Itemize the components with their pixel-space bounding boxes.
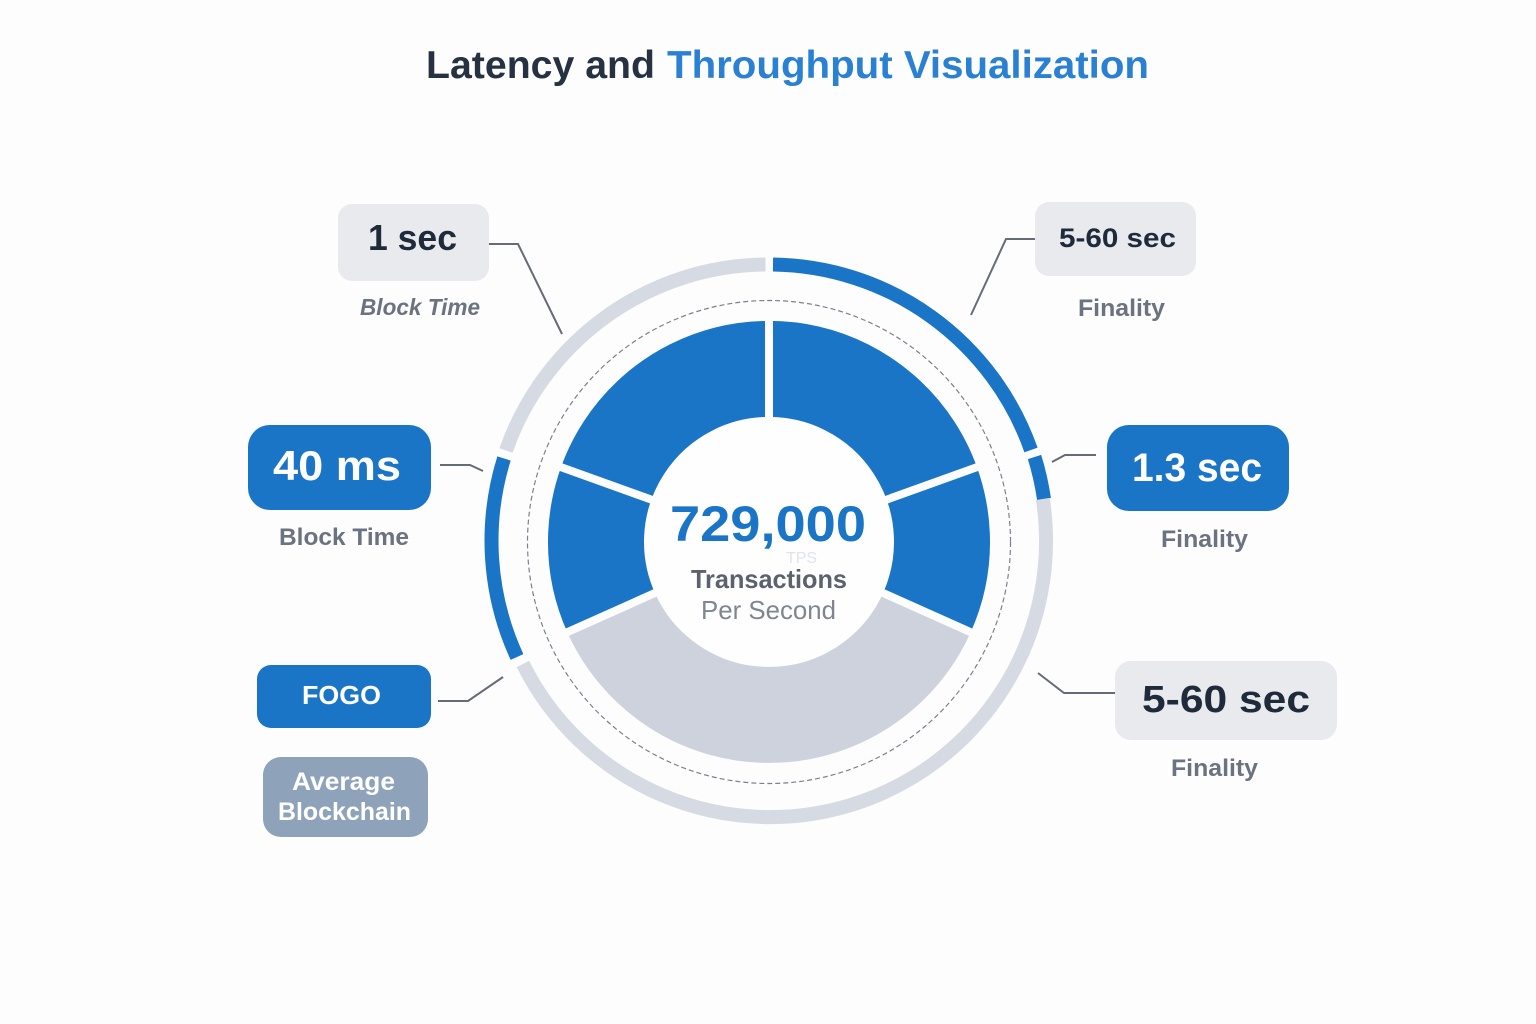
connector (1052, 455, 1096, 462)
callout: 5-60 sec finality top (971, 202, 1196, 322)
dashed guide ring (528, 300, 1010, 784)
value: 5-60 sec (1142, 679, 1310, 721)
ring segment: finality short blue (1034, 457, 1044, 499)
title: Throughput Visualization (667, 44, 1149, 87)
connector (1038, 673, 1115, 693)
throughput donut (553, 310, 985, 715)
caption: Block Time (279, 524, 409, 551)
donut: separators (553, 310, 985, 636)
donut: grey segment (611, 613, 927, 715)
donut: centre hole (644, 418, 894, 666)
title: Latency and (426, 44, 655, 87)
title (426, 44, 1149, 87)
label: FOGO (302, 680, 381, 710)
outer ring: latency segments (492, 264, 1046, 817)
ring segment: finality wide blue (773, 264, 1031, 450)
connector (489, 244, 562, 334)
value: 40 ms (273, 442, 401, 489)
donut: blue segments (596, 369, 942, 613)
caption: Finality (1078, 295, 1166, 322)
caption: Finality (1171, 755, 1259, 782)
connector (438, 677, 503, 701)
centre text (670, 496, 866, 625)
callout: 5-60 sec finality bottom (1038, 661, 1337, 782)
legend: FOGO (257, 665, 503, 728)
legend: Average Blockchain (263, 757, 428, 837)
ring segment: lower grey (523, 499, 1046, 817)
callout: 1.3 sec finality (1052, 425, 1289, 553)
badge (338, 204, 489, 281)
connector (440, 465, 483, 471)
callout: 1 sec block time (338, 204, 562, 334)
ring segment: upper left grey (506, 264, 766, 450)
connector (971, 239, 1035, 315)
chart: latency and throughput ring (492, 264, 1046, 817)
callout: 40 ms block time (248, 425, 483, 551)
caption: Block Time (360, 294, 480, 320)
badge (263, 757, 428, 837)
label line 2: Blockchain (278, 798, 411, 826)
badge (248, 425, 431, 510)
caption: Finality (1161, 526, 1249, 553)
unit: TPS: TPS (786, 550, 817, 567)
badge (1107, 425, 1289, 511)
badge (1035, 202, 1196, 276)
badge (1115, 661, 1337, 740)
caption: Transactions: Transactions (691, 564, 847, 594)
value: 729,000: 729,000 (670, 496, 866, 552)
value: 1 sec (368, 217, 457, 258)
badge (257, 665, 431, 728)
label line 1: Average (292, 768, 395, 796)
value: 1.3 sec (1132, 446, 1262, 490)
ring segment: block time blue (492, 458, 517, 657)
caption: Per Second: Per Second (701, 595, 836, 625)
value: 5-60 sec (1059, 223, 1176, 253)
